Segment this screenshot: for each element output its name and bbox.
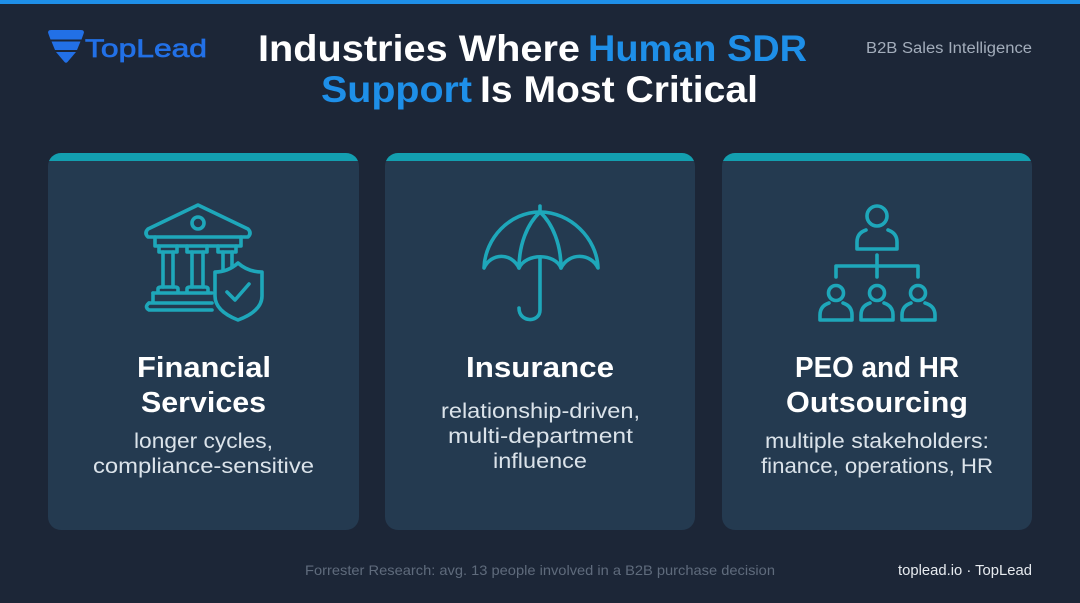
icon: umbrella bbox=[484, 206, 598, 320]
logo wordmark: TopLead bbox=[85, 35, 207, 63]
footer brand: toplead.io · TopLead bbox=[898, 563, 1032, 579]
heading: PEO and HR Outsourcing bbox=[786, 352, 968, 419]
icon: logo triangle bbox=[48, 30, 84, 63]
icon: org chart bbox=[820, 206, 935, 320]
top accent bar bbox=[0, 0, 1080, 4]
heading: Financial Services bbox=[137, 352, 271, 419]
description: Insurance: relationship-driven, bbox=[441, 399, 640, 423]
description: PEO and HR Outsourcing: finance, operations, HR bbox=[761, 454, 993, 478]
description: Financial Services: longer cycles, bbox=[134, 429, 273, 453]
description: Insurance: influence bbox=[493, 449, 587, 473]
description: Financial Services: compliance-sensitive bbox=[93, 454, 314, 478]
panel: Insurance bbox=[385, 153, 695, 530]
heading: PEO and HR Outsourcing: PEO and HR bbox=[795, 352, 959, 384]
heading: Financial Services: Services bbox=[141, 387, 266, 419]
heading: PEO and HR Outsourcing: Outsourcing bbox=[786, 387, 968, 419]
description: Insurance bbox=[441, 399, 640, 473]
icon: bank with shield bbox=[146, 205, 262, 320]
panel: PEO and HR Outsourcing bbox=[722, 153, 1032, 530]
title bbox=[258, 28, 807, 110]
heading: Financial Services: Financial bbox=[137, 352, 271, 384]
description: Insurance: multi-department bbox=[448, 424, 633, 448]
description: PEO and HR Outsourcing: multiple stakeholders: bbox=[765, 429, 989, 453]
footer source note: Forrester Research: avg. 13 people involved in a B2B purchase decision bbox=[305, 562, 775, 578]
title: Is Most Critical bbox=[480, 69, 758, 110]
logo: TopLead bbox=[48, 30, 207, 63]
description: Financial Services bbox=[93, 429, 314, 478]
title: Support bbox=[321, 69, 472, 110]
title: Industries Where bbox=[258, 28, 580, 69]
header tag: B2B Sales Intelligence: B2B Sales Intelligence bbox=[866, 40, 1032, 57]
title: Human SDR bbox=[588, 28, 807, 69]
heading: Insurance: Insurance bbox=[466, 352, 614, 384]
panel: Financial Services bbox=[48, 153, 359, 530]
description: PEO and HR Outsourcing bbox=[761, 429, 993, 478]
